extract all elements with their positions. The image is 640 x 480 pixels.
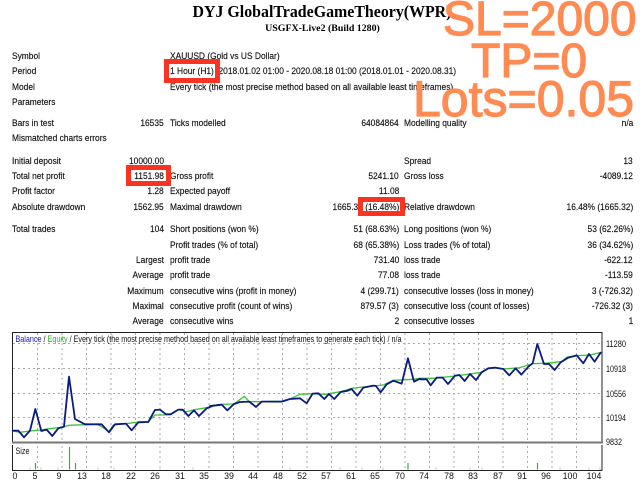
- panel: trade statistics: consecutive losses: [404, 316, 474, 327]
- panel: trade statistics: 68 (65.38%): [353, 240, 399, 250]
- y axis labels: 9832: [606, 437, 622, 447]
- panel: results summary: Spread: [404, 156, 431, 167]
- chart legend: Balance / Equity / Every tick (the most precise method based on all available least timeframes to generate each tick) / n/a: [16, 333, 402, 344]
- panel: trade statistics: 879.57 (3): [361, 301, 399, 312]
- panel: results summary: Maximal drawdown: [170, 202, 242, 213]
- panel: results summary: 16.48% (1665.32): [566, 202, 633, 213]
- title: DYJ GlobalTradeGameTheory(WPR): [193, 2, 451, 21]
- overlay: lots value: Lots=0.05: [413, 71, 634, 127]
- panel: trade statistics: 4 (299.71): [361, 286, 399, 297]
- panel: trade statistics: consecutive wins (profit in money): [170, 286, 296, 297]
- panel: trade statistics: consecutive profit (count of wins): [170, 301, 292, 312]
- balance line: [13, 344, 601, 437]
- panel: results summary: Gross profit: [170, 171, 213, 182]
- panel: results summary: 1665.32 (16.48%): [332, 202, 399, 213]
- panel: trade statistics: [12, 224, 633, 327]
- panel: trade statistics: -726.32 (3): [592, 301, 633, 312]
- panel: test settings: Mismatched charts errors: [12, 133, 107, 144]
- panel: test settings: 64084864: [362, 118, 399, 129]
- panel: trade statistics: 2: [394, 316, 399, 327]
- panel: test settings: Every tick (the most precise method based on all available least timeframes): [170, 82, 453, 93]
- panel: test settings: Model: [12, 82, 35, 93]
- panel: trade statistics: 36 (34.62%): [587, 240, 633, 250]
- panel: results summary: Total net profit: [12, 171, 65, 182]
- panel: trade statistics: Average: [133, 316, 164, 327]
- panel: test settings: Symbol: [12, 51, 40, 62]
- panel: trade statistics: Largest: [136, 255, 164, 266]
- equity line: [13, 353, 600, 432]
- panel: test settings: 16535: [141, 118, 164, 129]
- panel: trade statistics: Total trades: [12, 224, 55, 235]
- panel: trade statistics: -622.12: [605, 255, 633, 266]
- chart frame: [12, 332, 603, 470]
- panel: trade statistics: loss trade: [404, 270, 440, 281]
- subtitle: USGFX-Live2 (Build 1280): [265, 23, 380, 34]
- panel: trade statistics: 731.40: [373, 255, 399, 266]
- panel: trade statistics: 77.08: [378, 270, 399, 281]
- highlight: period: [164, 59, 220, 83]
- panel: trade statistics: Average: [133, 270, 164, 281]
- overlay: TP value: TP=0: [471, 35, 587, 88]
- panel: trade statistics: 53 (62.26%): [587, 224, 633, 235]
- panel: test settings: Period: [12, 66, 36, 77]
- panel: results summary: 1151.98: [134, 171, 164, 182]
- panel: trade statistics: Short positions (won %): [170, 224, 259, 235]
- panel: results summary: -4089.12: [600, 171, 633, 182]
- panel: trade statistics: 51 (68.63%): [353, 224, 399, 235]
- panel: results summary: Relative drawdown: [404, 202, 475, 213]
- panel: test settings: Parameters: [12, 97, 55, 108]
- panel: trade statistics: Profit trades (% of total): [170, 240, 258, 250]
- y axis labels: [606, 339, 626, 447]
- panel: trade statistics: consecutive wins: [170, 316, 233, 327]
- y axis labels: 10918: [606, 364, 626, 374]
- panel: results summary: Absolute drawdown: [12, 202, 85, 213]
- panel: trade statistics: loss trade: [404, 255, 440, 266]
- panel: test settings: Modelling quality: [404, 118, 467, 129]
- highlight: drawdown percent: [358, 197, 405, 216]
- panel: results summary: Gross loss: [404, 171, 444, 182]
- panel: results summary: 1562.95: [134, 202, 164, 213]
- panel: test settings: n/a: [621, 118, 633, 129]
- highlight: total net profit: [126, 165, 171, 186]
- panel: test settings: 1 Hour (H1) 2018.01.02 01:00 - 2020.08.18 01:00 (2018.01.01 - 2020.08.31): [170, 66, 456, 77]
- panel: trade statistics: profit trade: [170, 255, 210, 266]
- panel: results summary: Profit factor: [12, 186, 55, 197]
- panel: results summary: Initial deposit: [12, 156, 61, 167]
- size bars: [30, 447, 600, 470]
- y axis labels: 10194: [606, 413, 626, 423]
- y axis labels: 11280: [606, 339, 626, 349]
- panel: trade statistics: Loss trades (% of total): [404, 240, 490, 250]
- x axis labels: [13, 471, 601, 480]
- panel: trade statistics: 3 (-726.32): [592, 286, 633, 297]
- size panel label: Size: [16, 446, 30, 456]
- panel: trade statistics: profit trade: [170, 270, 210, 281]
- panel: test settings: Bars in test: [12, 118, 54, 129]
- panel: results summary: 10000.00: [129, 156, 164, 167]
- panel: trade statistics: consecutive losses (loss in money): [404, 286, 534, 297]
- panel: results summary: 13: [624, 156, 633, 167]
- panel: results summary: 1.28: [148, 186, 164, 197]
- panel: results summary: Expected payoff: [170, 186, 230, 197]
- panel: trade statistics: consecutive loss (count of losses): [404, 301, 530, 312]
- panel: trade statistics: Maximum: [128, 286, 164, 297]
- panel: trade statistics: -113.59: [605, 270, 633, 281]
- panel: results summary: 11.08: [379, 186, 399, 197]
- panel: test settings: XAUUSD (Gold vs US Dollar): [170, 51, 280, 62]
- panel: results summary: [12, 156, 633, 213]
- y axis labels: 10556: [606, 389, 626, 399]
- panel: trade statistics: Long positions (won %): [404, 224, 491, 235]
- panel: test settings: Ticks modelled: [170, 118, 226, 129]
- panel: test settings: [12, 51, 634, 144]
- panel: trade statistics: 1: [628, 316, 633, 327]
- panel: trade statistics: 104: [150, 224, 164, 235]
- panel: trade statistics: Maximal: [133, 301, 164, 312]
- panel: results summary: 5241.10: [369, 171, 399, 182]
